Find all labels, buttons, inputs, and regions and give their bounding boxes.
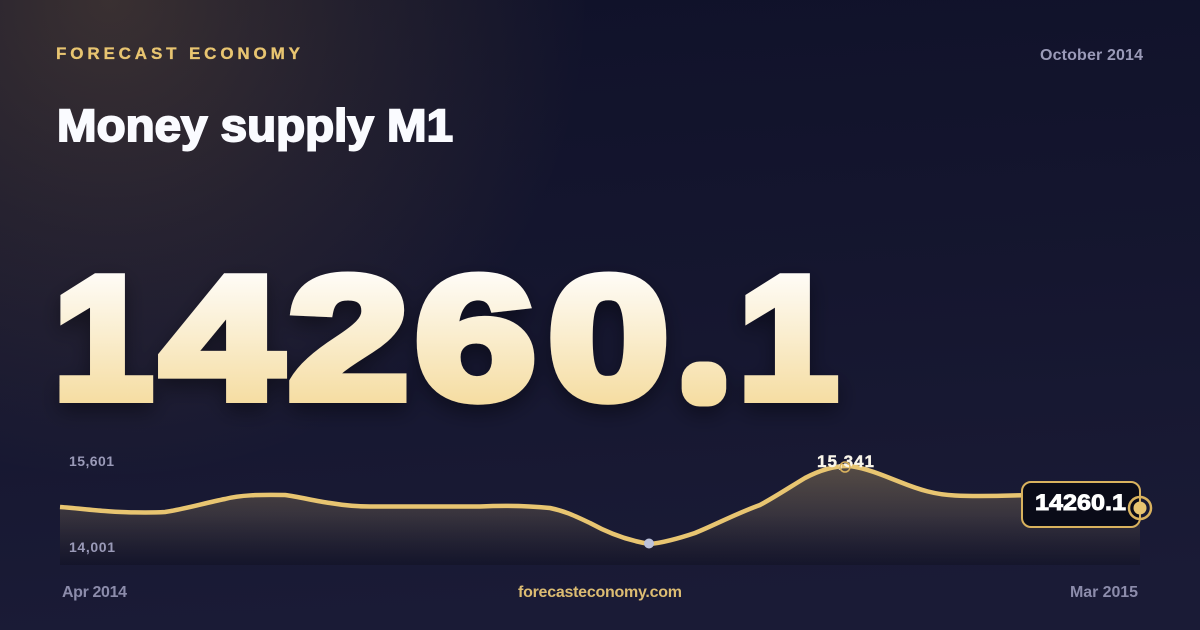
- axis min label: 14,001: [69, 539, 115, 555]
- date: October 2014: [1040, 47, 1143, 64]
- low point marker: [644, 538, 654, 548]
- big value: 4260: [161, 241, 669, 435]
- area fill: [60, 466, 1140, 565]
- peak value label: 15,341: [817, 452, 874, 471]
- title: Money supply M1: [57, 100, 453, 151]
- end date: Mar 2015: [1070, 584, 1138, 601]
- source url: forecasteconomy.com: [518, 584, 682, 601]
- axis max label: 15,601: [69, 453, 114, 469]
- current value callout: [1022, 482, 1140, 527]
- big value: [53, 241, 838, 435]
- brand label: FORECAST ECONOMY: [56, 44, 301, 63]
- start date: Apr 2014: [62, 584, 127, 601]
- big value: 1: [53, 241, 153, 435]
- current point marker: [1129, 497, 1151, 519]
- current value callout: 14260.1: [1035, 490, 1126, 515]
- big value: .: [696, 335, 712, 402]
- big value: 1: [738, 241, 838, 435]
- trend line: [60, 466, 1030, 544]
- peak point marker: [840, 462, 850, 472]
- sparkline chart: [60, 452, 1151, 565]
